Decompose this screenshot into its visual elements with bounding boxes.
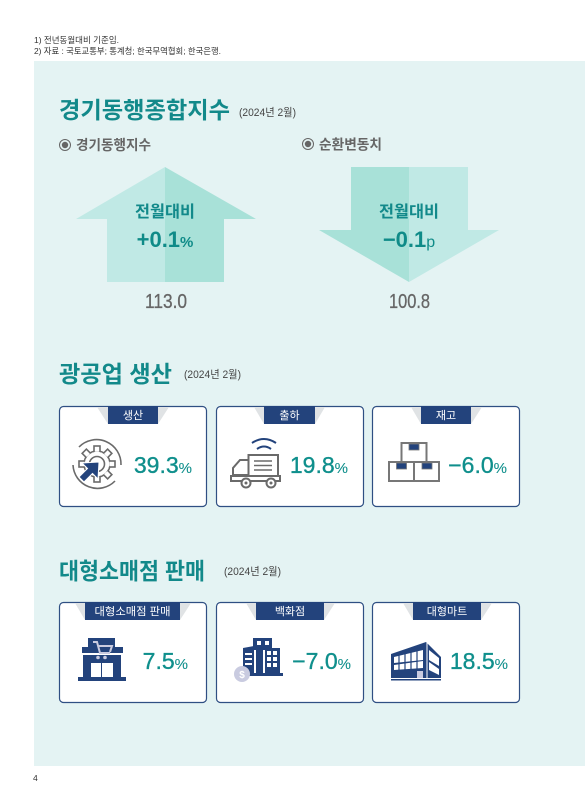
value: 19.8%: 19.8% bbox=[290, 452, 348, 478]
tab: department store bbox=[246, 602, 335, 620]
icon: delivery truck bbox=[231, 439, 280, 488]
down arrow: 전월대비 bbox=[379, 203, 439, 221]
icon: gear with arrow bbox=[73, 440, 121, 488]
heading: mining and manufacturing: 광공업 생산 bbox=[59, 361, 172, 387]
tab: shipments bbox=[254, 406, 325, 424]
tab: hypermarket bbox=[403, 602, 492, 620]
subheading: cyclical component: 순환변동치 bbox=[319, 136, 382, 152]
tab: hypermarket: 대형마트 bbox=[427, 605, 467, 618]
up arrow bbox=[76, 167, 256, 282]
value: 18.5%: 18.5% bbox=[450, 648, 508, 674]
value: 39.3%: 39.3% bbox=[134, 452, 192, 478]
icon: department store buildings bbox=[234, 638, 283, 682]
card: department store bbox=[216, 602, 364, 702]
icon: store with cart bbox=[78, 638, 126, 681]
heading: composite index: 경기동행종합지수 bbox=[59, 97, 230, 123]
tab: inventory: 재고 bbox=[436, 409, 456, 422]
down arrow: −0.1p bbox=[383, 227, 435, 252]
card: inventory bbox=[372, 406, 520, 506]
value: 7.5%: 7.5% bbox=[143, 648, 188, 674]
tab: large retail: 대형소매점 판매 bbox=[94, 605, 170, 618]
heading: large retail sales: (2024년 2월) bbox=[224, 565, 281, 578]
tab: production bbox=[97, 406, 169, 424]
heading: large retail sales: 대형소매점 판매 bbox=[59, 558, 205, 584]
value: -6.0%: −6.0% bbox=[448, 452, 507, 478]
tab: inventory bbox=[411, 406, 482, 424]
icon: stacked boxes bbox=[389, 443, 439, 481]
heading: mining and manufacturing bbox=[59, 361, 241, 387]
subheading: coincident index: 경기동행지수 bbox=[76, 137, 151, 153]
card: shipments bbox=[216, 406, 364, 506]
footnotes bbox=[34, 35, 221, 56]
footnotes: 1) 전년동월대비 기준임. bbox=[34, 35, 119, 45]
tab: department store: 백화점 bbox=[275, 605, 305, 618]
card: production bbox=[60, 406, 206, 506]
tab: production: 생산 bbox=[123, 409, 143, 422]
down arrow bbox=[319, 167, 499, 282]
value: -7.0%: −7.0% bbox=[292, 648, 351, 674]
icon: department store buildings: $ bbox=[239, 670, 245, 681]
up arrow: 전월대비 bbox=[135, 203, 195, 221]
heading: composite index: (2024년 2월) bbox=[239, 106, 296, 119]
card: hypermarket bbox=[372, 602, 520, 702]
card: large retail bbox=[60, 602, 206, 702]
footnotes: 2) 자료 : 국토교통부; 통계청; 한국무역협회; 한국은행. bbox=[34, 46, 221, 56]
up arrow: +0.1% bbox=[137, 227, 193, 252]
value: 100.8: 100.8 bbox=[389, 291, 430, 313]
tab: large retail bbox=[75, 602, 191, 620]
value: 113.0: 113.0 bbox=[145, 291, 187, 313]
page number: 4 bbox=[33, 773, 38, 783]
heading: large retail sales bbox=[59, 558, 281, 584]
icon: large mart building bbox=[391, 642, 441, 680]
heading: mining and manufacturing: (2024년 2월) bbox=[184, 368, 241, 381]
tab: shipments: 출하 bbox=[279, 408, 300, 422]
